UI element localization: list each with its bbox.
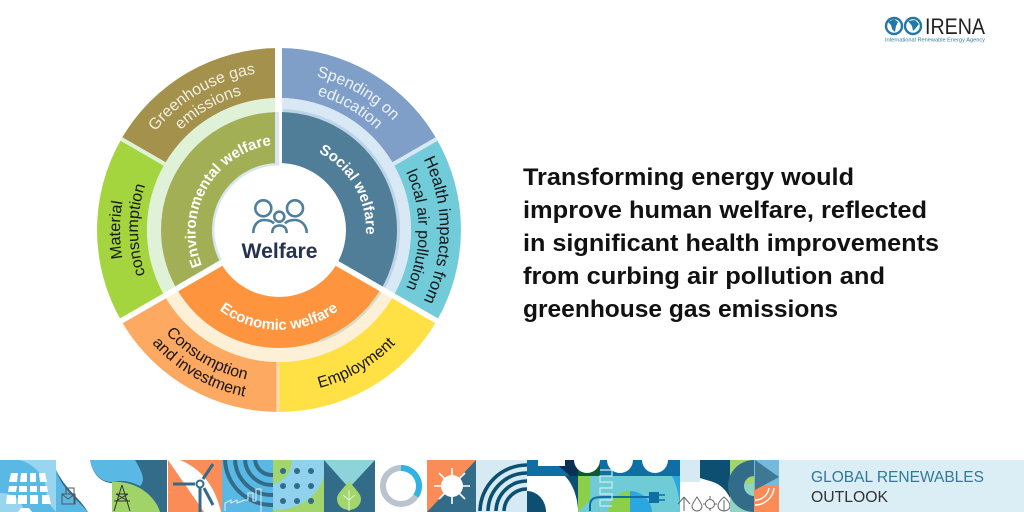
- tile: white swoosh and tower: [56, 460, 167, 512]
- outer segment: material consumption: [97, 139, 164, 318]
- panel: report title: GLOBAL RENEWABLES: [811, 469, 984, 486]
- wheel diagram: [97, 48, 461, 412]
- tile: circle and triangle: [728, 460, 779, 512]
- tile: sun: [427, 460, 476, 512]
- outer segment: material consumption: consumption: [128, 184, 145, 276]
- tile: nature icons: [678, 460, 730, 512]
- logo: IRENA: International Renewable Energy Agency: [885, 38, 985, 44]
- icon: ring gauge: [383, 468, 419, 504]
- outer segment: consumption and investment: Consumption: [168, 328, 247, 380]
- inner segment: social welfare: Social welfare: [320, 145, 375, 234]
- tile: leaf: [324, 460, 375, 512]
- headline text block: Transforming energy would: [523, 164, 854, 191]
- outer segment: material consumption: Material: [109, 200, 122, 259]
- outer segment: employment: [280, 298, 436, 412]
- outer segment: greenhouse gas emissions: [122, 48, 275, 164]
- pale ring: environmental: [147, 98, 279, 296]
- inner rim tint: [283, 109, 400, 290]
- outer segment: greenhouse gas emissions: Greenhouse gas: [149, 66, 254, 129]
- headline text block: greenhouse gas emissions: [523, 296, 838, 323]
- tile: wind turbine: [168, 460, 222, 512]
- outer segment: spending on education: [282, 48, 436, 164]
- outer segment: spending on education: education: [318, 88, 381, 129]
- outer segment: health impacts from local air pollution: [394, 139, 461, 318]
- inner segment: economic welfare: Economic welfare: [220, 302, 338, 330]
- inner segment: environmental welfare: Environmental welfare: [184, 138, 270, 268]
- icon: infinity globes: [886, 18, 921, 34]
- footer banner: [0, 460, 1024, 512]
- headline text block: in significant health improvements: [523, 230, 939, 257]
- outer segment: consumption and investment: [122, 298, 276, 412]
- outer segment: health impacts from local air pollution: local air pollution: [406, 168, 430, 290]
- outer segment: consumption and investment: and investment: [153, 339, 246, 396]
- tile: plug: [574, 460, 680, 512]
- outer segment: health impacts from local air pollution: Health impacts from: [424, 156, 451, 303]
- headline text block: [523, 164, 939, 323]
- pale ring: economic: [165, 289, 393, 362]
- inner segment backing: [161, 112, 279, 289]
- center label: Welfare: Welfare: [242, 240, 318, 263]
- headline text block: improve human welfare, reflected: [523, 197, 927, 224]
- tile: solar panel: [0, 460, 56, 512]
- panel: report title: [779, 460, 1024, 512]
- inner segment: environmental welfare: [161, 112, 275, 286]
- tile: navy blocks: [527, 460, 578, 512]
- logo: IRENA: IRENA: [925, 14, 985, 39]
- outer segment: greenhouse gas emissions: emissions: [176, 88, 241, 128]
- outer segment: spending on education: Spending on: [318, 66, 398, 120]
- center icon: three people: [253, 200, 307, 233]
- panel: report title: OUTLOOK: [811, 489, 888, 506]
- headline text block: from curbing air pollution and: [523, 263, 885, 290]
- outer segment: employment: Employment: [318, 338, 396, 388]
- inner segment: social welfare: [282, 112, 397, 286]
- logo: IRENA: [885, 14, 985, 44]
- tile: rainbow arcs: [476, 460, 527, 512]
- tile: dots: [273, 460, 324, 512]
- tile: concentric arcs with factory: [222, 460, 273, 512]
- pale ring: social: [279, 98, 411, 296]
- inner segment: economic welfare: [178, 266, 380, 348]
